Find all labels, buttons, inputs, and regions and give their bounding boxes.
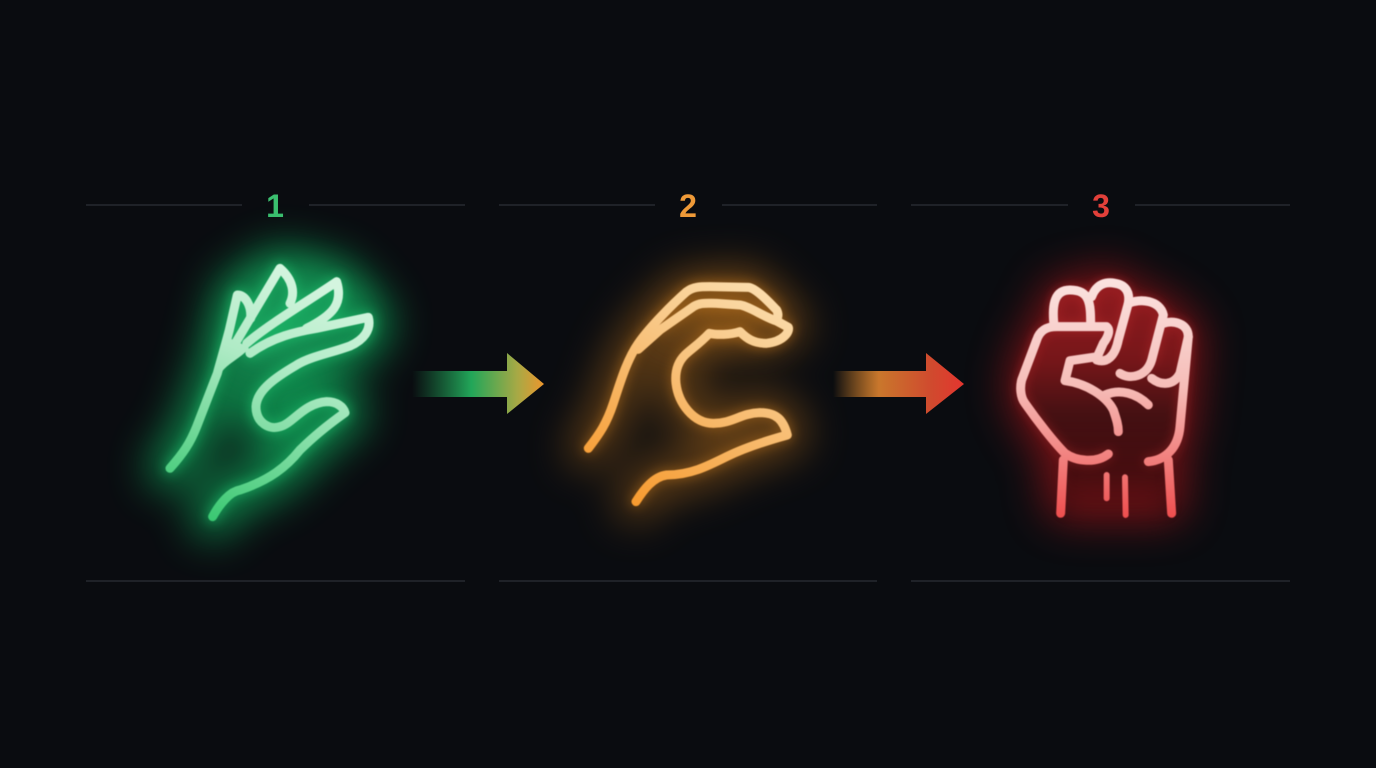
icon: cupped orange hand: [588, 287, 789, 502]
number 3: 3: [1092, 188, 1110, 224]
panel: step 2 header rule: [499, 204, 877, 206]
icon: red fist: [1021, 283, 1188, 517]
panel: step 1 header rule: [86, 204, 465, 206]
icon: open green hand: [170, 268, 369, 517]
number 1: 1: [266, 188, 284, 224]
bottom rules: [86, 580, 1290, 582]
arrow: green to orange: [412, 353, 544, 414]
number 2: 2: [679, 188, 697, 224]
arrow: orange to red: [833, 353, 964, 414]
panel: step 3 header rule: [911, 204, 1290, 206]
